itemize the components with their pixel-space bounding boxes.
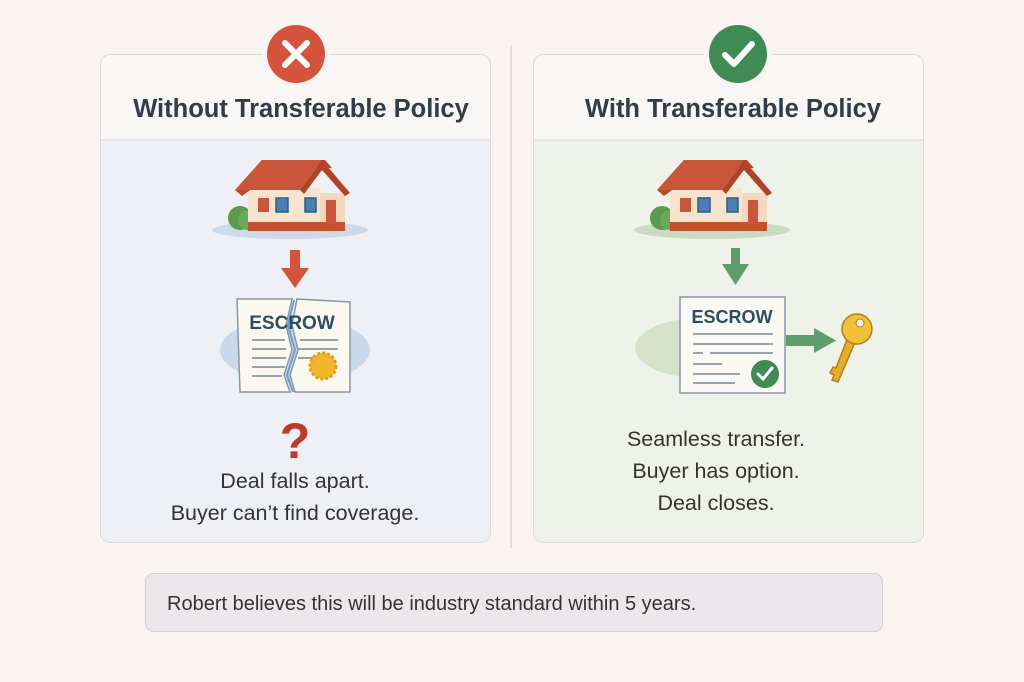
text: seamless transfer: Buyer has option. bbox=[632, 459, 800, 483]
arrow: green right bbox=[786, 328, 836, 353]
arrow: red down bbox=[281, 250, 309, 288]
heading: with: With Transferable Policy bbox=[585, 95, 882, 123]
icon: red x bbox=[262, 20, 330, 88]
callout: industry standard bbox=[146, 574, 882, 632]
icon: broken escrow document bbox=[220, 299, 370, 392]
divider bbox=[510, 45, 512, 548]
icon: broken escrow document: ESCROW bbox=[249, 313, 335, 334]
text: deal falls apart bbox=[171, 469, 419, 525]
callout: industry standard: Robert believes this will be industry standard within 5 years. bbox=[167, 593, 696, 615]
icon: question mark: ? bbox=[280, 413, 310, 469]
heading: without: Without Transferable Policy bbox=[133, 95, 470, 123]
icon: house bbox=[634, 160, 790, 239]
arrow: green down bbox=[722, 248, 749, 285]
icon: escrow document with check: ESCROW bbox=[692, 307, 773, 327]
text: deal falls apart: Deal falls apart. bbox=[220, 469, 370, 493]
icon: house bbox=[212, 160, 368, 239]
text: seamless transfer: Deal closes. bbox=[657, 491, 775, 515]
panel: without transferable policy bbox=[100, 20, 490, 542]
text: seamless transfer: Seamless transfer. bbox=[627, 427, 805, 451]
icon: key bbox=[830, 314, 872, 382]
icon: escrow document with check bbox=[635, 297, 785, 393]
panel: with transferable policy bbox=[534, 20, 924, 542]
text: deal falls apart: Buyer can’t find coverage. bbox=[171, 501, 419, 525]
icon: green check bbox=[704, 20, 772, 88]
text: seamless transfer bbox=[627, 427, 805, 515]
